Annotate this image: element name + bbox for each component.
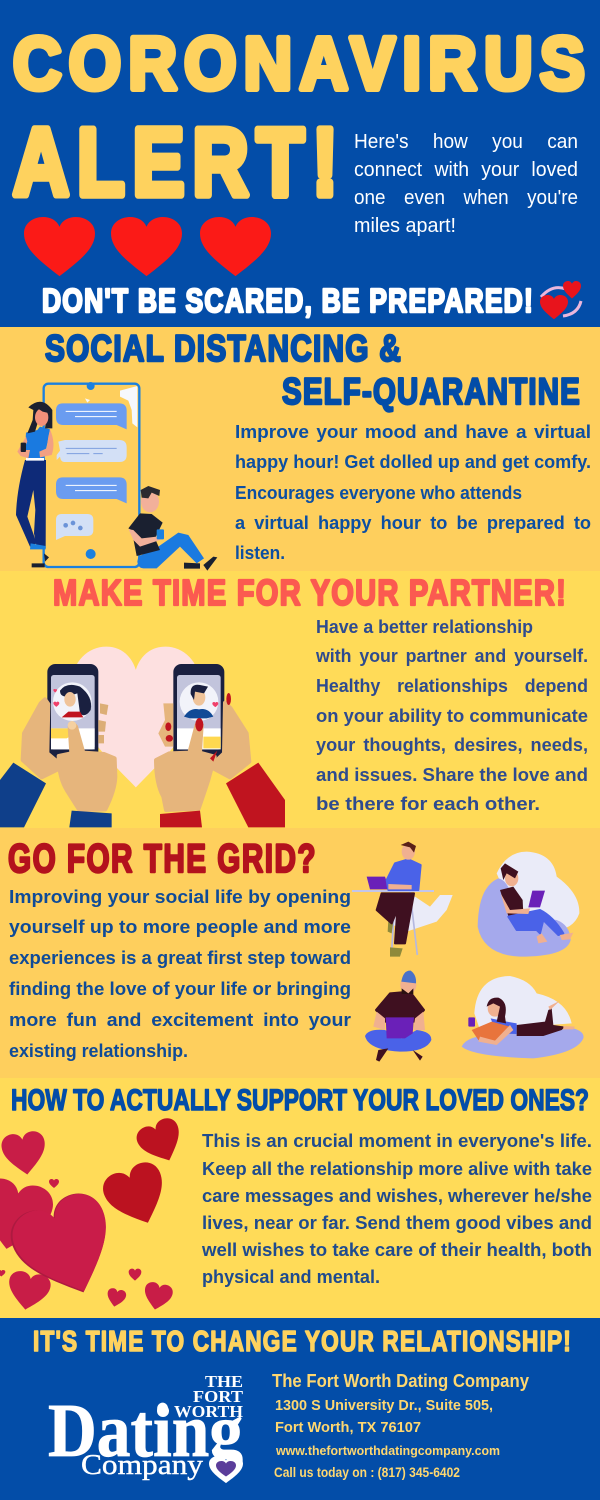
heading: social distancing: SOCIAL DISTANCING & (45, 328, 402, 369)
intro text: one even when you're (354, 187, 578, 209)
right phone (173, 664, 224, 762)
text: go for the grid: existing relationship. (9, 1041, 188, 1061)
icon: three red hearts (24, 217, 271, 276)
text: how to support: This is an crucial moment in everyone's life. (202, 1131, 592, 1151)
man (184, 557, 217, 571)
text: contact details: Call us today on : (817) 345-6402 (274, 1465, 460, 1480)
title: alert: ALERT! (13, 109, 346, 216)
text: go for the grid (9, 887, 351, 1061)
text: make time: and issues. Share the love and (316, 765, 588, 785)
intro text: Here's how you can (354, 131, 578, 153)
text: make time: Have a better relationship (316, 617, 533, 637)
text: social distancing: happy hour! Get dolled up and get comfy. (235, 452, 591, 472)
text: contact details (272, 1371, 529, 1480)
lying woman (474, 976, 572, 1030)
text: contact details: 1300 S University Dr., Suite 505, (275, 1397, 493, 1414)
text: make time: with your partner and yourself. (315, 646, 588, 666)
logo: the fort worth dating company: THE (205, 1372, 243, 1391)
seated man with beanie (376, 992, 424, 1022)
text: go for the grid: more fun and excitement into your (9, 1010, 351, 1030)
illustration: phone and two people (16, 382, 217, 571)
text: how to support: Keep all the relationship more alive with take (202, 1159, 592, 1179)
text: social distancing: Improve your mood and have a virtual (235, 422, 591, 442)
intro text (354, 131, 578, 237)
panel: header (0, 0, 600, 327)
text: social distancing: Encourages everyone who attends (235, 483, 522, 503)
text: go for the grid: finding the love of your life or bringing (9, 979, 351, 999)
text: how to support: lives, near or far. Send them good vibes and (202, 1213, 592, 1233)
text: contact details: Fort Worth, TX 76107 (275, 1419, 421, 1436)
logo: the fort worth dating company: FORT (193, 1387, 244, 1406)
text: how to support: care messages and wishes, wherever he/she (202, 1186, 592, 1206)
text: go for the grid: yourself up to more people and more (9, 917, 351, 937)
text: contact details: The Fort Worth Dating Company (272, 1371, 529, 1391)
logo: the fort worth dating company (48, 1372, 244, 1483)
illustration: four people on laptops (352, 842, 584, 1062)
panel: go for the grid (0, 828, 600, 1078)
text: how to support: physical and mental. (202, 1267, 380, 1287)
text: how to support (201, 1131, 592, 1287)
text: make time (315, 617, 588, 814)
text: make time: Healthy relationships depend (316, 676, 588, 696)
panel: social distancing (0, 327, 600, 571)
intro text: miles apart! (354, 215, 456, 237)
illustration: scattered hearts (0, 1115, 189, 1313)
text: make time: be there for each other. (316, 794, 540, 814)
logo: the fort worth dating company: Dating (48, 1389, 243, 1473)
text: go for the grid: experiences is a great first step toward (9, 948, 351, 968)
text: how to support: well wishes to take care of their health, both (201, 1240, 592, 1260)
text: make time: on your ability to communicate (316, 706, 588, 726)
logo: the fort worth dating company: Company (81, 1450, 203, 1481)
panel: footer (0, 1318, 600, 1500)
panel: make time for your partner (0, 571, 600, 828)
text: go for the grid: Improving your social life by opening (9, 887, 351, 907)
woman (32, 553, 49, 567)
text: make time: your thoughts, desires, needs, (316, 735, 588, 755)
intro text: connect with your loved (354, 159, 578, 181)
illustration: hands holding phones with heart (0, 647, 285, 827)
left phone (47, 664, 98, 762)
logo: the fort worth dating company: WORTH (174, 1402, 243, 1421)
panel: how to support loved ones (0, 1078, 600, 1318)
heading: go for the grid: GO FOR THE GRID? (8, 837, 317, 881)
man at table (390, 895, 453, 932)
text: social distancing (235, 422, 591, 563)
text: social distancing: a virtual happy hour to be prepared to (235, 513, 591, 533)
text: social distancing: listen. (235, 543, 285, 563)
icon: revolving hearts (540, 281, 581, 319)
woman on beanbag (497, 852, 579, 930)
text: contact details: www.thefortworthdatingcompany.com (275, 1443, 500, 1458)
